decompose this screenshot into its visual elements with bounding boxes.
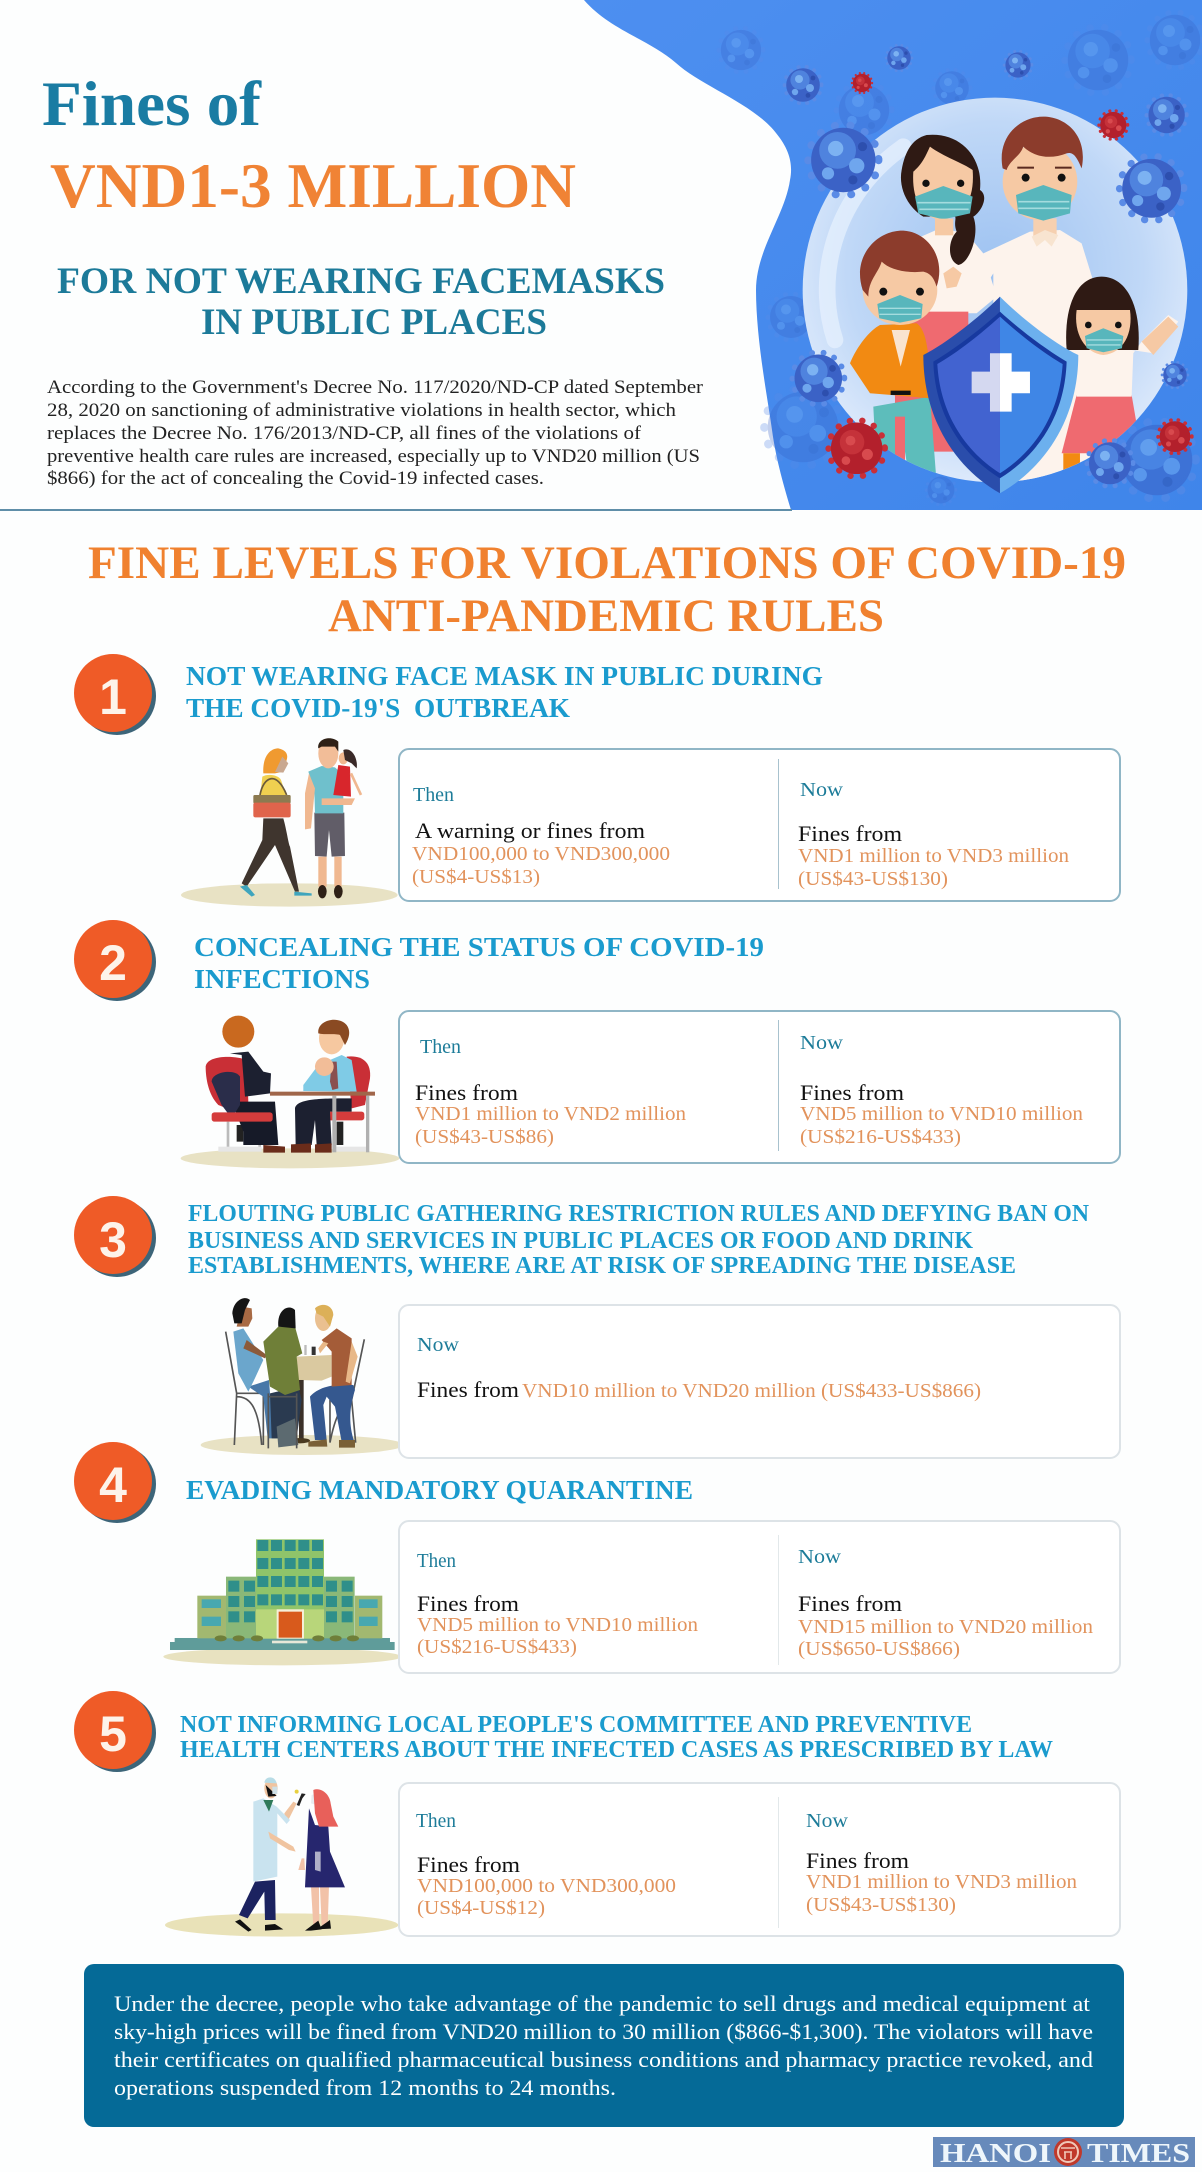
heading 1: THE COVID-19'S OUTBREAK	[186, 693, 570, 723]
header rule	[0, 509, 792, 511]
fine box 4: Then	[417, 1550, 456, 1572]
heading 3: FLOUTING PUBLIC GATHERING RESTRICTION RULES AND DEFYING BAN ON	[188, 1200, 1089, 1227]
fine box 4: (US$650-US$866)	[798, 1638, 960, 1660]
girl	[1062, 395, 1142, 453]
fine box 2: VND5 million to VND10 million	[800, 1103, 1083, 1125]
badge 2: 2	[99, 935, 127, 991]
heading 4: EVADING MANDATORY QUARANTINE	[186, 1475, 693, 1505]
fine box 1: Then	[413, 784, 454, 806]
badge 1	[74, 654, 156, 735]
fine box 5: Fines from	[417, 1852, 521, 1877]
subtitle: FOR NOT WEARING FACEMASKS	[57, 261, 665, 302]
intro paragraph: replaces the Decree No. 176/2013/ND-CP, all fines of the violations of	[47, 424, 642, 444]
heading 5: HEALTH CENTERS ABOUT THE INFECTED CASES AS PRESCRIBED BY LAW	[180, 1736, 1053, 1763]
section title: ANTI-PANDEMIC RULES	[328, 590, 884, 642]
illustration: family behind shield in bubble	[792, 95, 1192, 493]
fine box 4: VND15 million to VND20 million	[798, 1616, 1093, 1638]
fine box 4: Fines from	[417, 1591, 520, 1616]
fine box 2: Fines from	[800, 1080, 905, 1105]
badge 4	[74, 1442, 156, 1523]
fine box 5: (US$43-US$130)	[806, 1894, 956, 1916]
fine box 5: VND100,000 to VND300,000	[417, 1875, 676, 1897]
logo: Hanoi Times	[933, 2137, 1195, 2168]
icon: background virus particles	[719, 12, 1202, 505]
boy	[873, 398, 936, 473]
title: Fines of: Fines of	[42, 68, 262, 139]
fine box 5: Then	[416, 1810, 456, 1832]
badge 5	[74, 1691, 156, 1772]
illustration: three people at a cafe table	[201, 1298, 404, 1455]
fine box 2: Fines from	[415, 1080, 519, 1105]
heading 2: CONCEALING THE STATUS OF COVID-19	[194, 932, 764, 962]
fine box 2: Now	[800, 1032, 844, 1054]
fine box 1: Now	[800, 779, 844, 801]
intro paragraph: preventive health care rules are increased, especially up to VND20 million (US	[47, 447, 700, 467]
fine box 4: (US$216-US$433)	[417, 1636, 577, 1658]
callout: bottom note	[84, 1964, 1124, 2127]
fine box 3: VND10 million to VND20 million (US$433-US$866)	[522, 1380, 981, 1402]
fine box 5: Fines from	[806, 1848, 910, 1873]
fine box 5	[399, 1783, 1120, 1936]
fine box 2: Then	[420, 1036, 461, 1058]
panel: item 4	[74, 1442, 1120, 1673]
panel: item 1	[74, 654, 1120, 907]
callout: bottom note: operations suspended from 12 months to 24 months.	[114, 2075, 616, 2100]
illustration: two people at a table	[181, 1016, 399, 1168]
icon: shield with cross	[923, 297, 1078, 493]
header blue wave background	[584, 0, 1202, 510]
fine box 4: Now	[798, 1546, 842, 1568]
subtitle	[57, 261, 665, 343]
fine box 2: (US$43-US$86)	[415, 1126, 554, 1148]
heading 2	[194, 932, 764, 994]
badge 2	[74, 920, 156, 1001]
fine box 3: Fines from	[417, 1377, 520, 1402]
badge 3: 3	[99, 1212, 127, 1268]
badge 5: 5	[99, 1706, 127, 1762]
illustration: quarantine building	[163, 1539, 401, 1665]
logo: Hanoi Times: TIMES	[1087, 2138, 1190, 2168]
fine box 4: Fines from	[798, 1591, 903, 1616]
heading 3: BUSINESS AND SERVICES IN PUBLIC PLACES OR FOOD AND DRINK	[188, 1227, 973, 1254]
fine box 1: Fines from	[798, 821, 903, 846]
father body	[977, 230, 1097, 483]
callout: bottom note: sky-high prices will be fined from VND20 million to 30 million ($866-$1,300). The violators will have	[114, 2019, 1093, 2044]
fine box 1: VND1 million to VND3 million	[798, 845, 1069, 867]
intro paragraph: According to the Government's Decree No. 117/2020/ND-CP dated September	[47, 378, 703, 398]
fine box 2: VND1 million to VND2 million	[415, 1103, 686, 1125]
father head	[1003, 143, 1077, 220]
section title: FINE LEVELS FOR VIOLATIONS OF COVID-19	[88, 537, 1126, 589]
fine box 2	[399, 1011, 1120, 1163]
fine box 1: A warning or fines from	[415, 818, 646, 843]
logo: Hanoi Times: HANOI	[940, 2138, 1051, 2168]
heading 1: NOT WEARING FACE MASK IN PUBLIC DURING	[186, 661, 823, 691]
intro paragraph: $866) for the act of concealing the Covid-19 infected cases.	[47, 469, 544, 489]
panel: item 2	[74, 920, 1120, 1168]
callout: bottom note: Under the decree, people who take advantage of the pandemic to sell drugs and medical equipment at	[114, 1991, 1090, 2016]
fine box 3: Now	[417, 1334, 460, 1356]
fine box 3	[399, 1305, 1120, 1458]
heading 5: NOT INFORMING LOCAL PEOPLE'S COMMITTEE AND PREVENTIVE	[180, 1711, 972, 1738]
subtitle: IN PUBLIC PLACES	[201, 302, 547, 343]
viruses over bubble	[808, 125, 879, 195]
heading 1	[186, 661, 823, 723]
fine box 1: VND100,000 to VND300,000	[412, 843, 670, 865]
heading 3: ESTABLISHMENTS, WHERE ARE AT RISK OF SPREADING THE DISEASE	[188, 1252, 1016, 1279]
fine box 1: (US$43-US$130)	[798, 868, 948, 890]
section title	[88, 537, 1126, 642]
panel: item 5	[74, 1691, 1120, 1937]
badge 1: 1	[99, 669, 127, 725]
fine box 4: VND5 million to VND10 million	[417, 1614, 698, 1636]
heading 2: INFECTIONS	[194, 964, 370, 994]
callout: bottom note: their certificates on qualified pharmaceutical business conditions and pharmacy practice revoked, and	[114, 2047, 1093, 2072]
illustration: doctor checking temperature	[165, 1777, 398, 1937]
fine box 1: (US$4-US$13)	[412, 866, 540, 888]
fine box 5: Now	[806, 1810, 849, 1832]
heading 3	[188, 1200, 1089, 1279]
fine box 1	[399, 749, 1120, 901]
title: VND1-3 MILLION: VND1-3 MILLION	[50, 151, 576, 221]
panel: item 3	[74, 1196, 1120, 1458]
fine box 5: (US$4-US$12)	[417, 1897, 545, 1919]
fine box 2: (US$216-US$433)	[800, 1126, 961, 1148]
illustration: family walking	[181, 738, 398, 907]
heading 5	[180, 1711, 1053, 1763]
mother	[921, 230, 994, 314]
fine box 5: VND1 million to VND3 million	[806, 1871, 1077, 1893]
badge 3	[74, 1196, 156, 1277]
fine box 4	[399, 1521, 1120, 1673]
badge 4: 4	[99, 1457, 127, 1513]
intro paragraph: 28, 2020 on sanctioning of administrative violations in health sector, which	[47, 401, 676, 421]
intro paragraph	[47, 378, 703, 489]
